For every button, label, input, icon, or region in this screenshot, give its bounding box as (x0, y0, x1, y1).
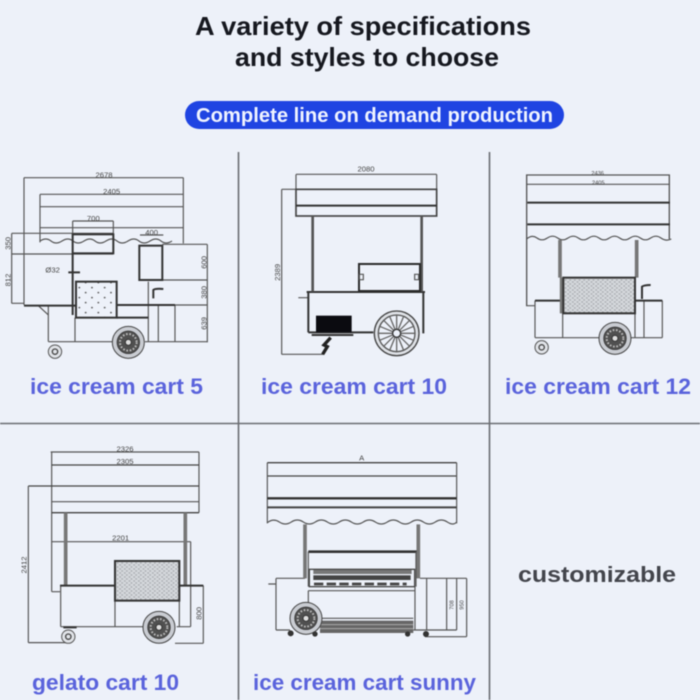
title: and styles to choose (235, 42, 499, 72)
subtitle pill: Complete line on demand production (196, 105, 553, 127)
panel: gelato cart 10 (20, 445, 203, 695)
drawing: cart 5: Ø32 (45, 265, 60, 274)
panel: ice cream cart 10 (261, 165, 447, 399)
title: A variety of specifications (195, 11, 531, 41)
drawing: cart 5: 2678 (95, 170, 113, 179)
drawing: cart sunny (267, 454, 467, 637)
panel: ice cream cart 12 (505, 171, 691, 399)
label: gelato cart 10: gelato cart 10 (32, 670, 179, 695)
drawing: cart sunny: A (359, 454, 365, 463)
title (195, 11, 531, 72)
drawing: cart 12: 2436 (591, 171, 604, 177)
panel: ice cream cart 5 (4, 170, 209, 399)
drawing: cart 10: 2080 (357, 165, 375, 174)
panel: ice cream cart sunny (253, 454, 477, 695)
label: ice cream cart 5: ice cream cart 5 (30, 374, 203, 399)
drawing: cart 5: 400 (145, 228, 158, 237)
drawing: cart 12 (526, 171, 671, 354)
drawing: cart 5: 700 (87, 214, 100, 223)
drawing: gelato cart 10: 2201 (112, 534, 129, 543)
drawing: cart 12: 2405 (592, 180, 605, 186)
drawing: cart 5: 812 (4, 274, 13, 286)
drawing: gelato cart 10: 2326 (116, 445, 134, 454)
drawing: cart 10 (273, 165, 437, 356)
drawing: cart 5: 600 (200, 256, 209, 269)
label: ice cream cart 10: ice cream cart 10 (261, 374, 447, 399)
drawing: gelato cart 10: 2305 (116, 457, 134, 466)
drawing: cart 5: 639 (200, 317, 209, 330)
drawing: cart 10: 2389 (273, 264, 282, 281)
drawing: gelato cart 10: 2412 (20, 556, 29, 574)
label: ice cream cart 12: ice cream cart 12 (505, 374, 691, 399)
drawing: cart 5: 2405 (103, 187, 120, 196)
drawing: cart sunny: 708 (449, 600, 455, 610)
label: ice cream cart sunny: ice cream cart sunny (253, 670, 477, 695)
drawing: cart sunny: 950 (459, 600, 465, 610)
drawing: gelato cart 10 (20, 445, 203, 643)
drawing: cart 5: 350 (4, 237, 13, 250)
drawing: cart 5: 380 (200, 286, 209, 299)
drawing: gelato cart 10: 800 (194, 607, 203, 620)
panel: customizable: customizable (518, 562, 676, 587)
drawing: cart 5 (4, 170, 209, 358)
